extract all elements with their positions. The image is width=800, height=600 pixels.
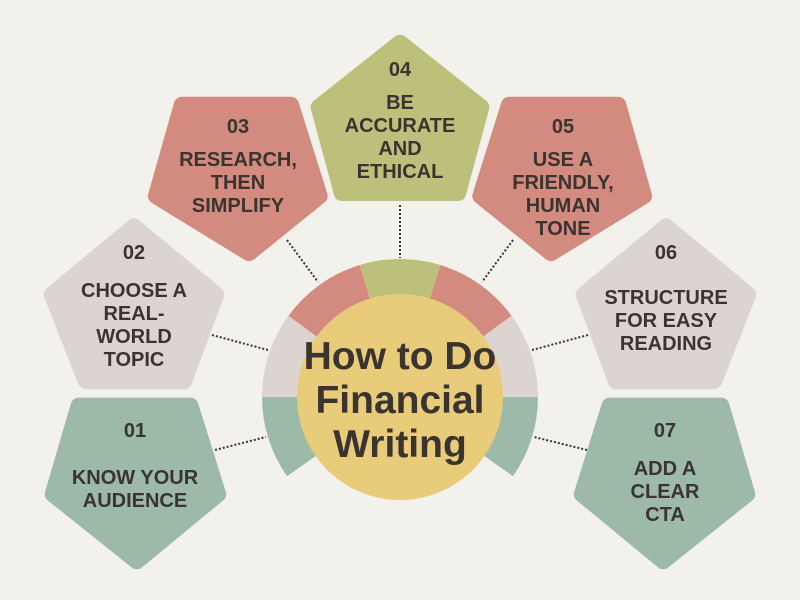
center circle title: Financial <box>315 379 485 422</box>
panel: 07: CTA <box>645 504 685 526</box>
panel: 07: 07 <box>654 420 676 442</box>
panel: 04 <box>319 43 481 193</box>
panel: 02 <box>52 226 216 381</box>
panel: 04: AND <box>378 138 422 160</box>
center circle title <box>297 294 503 500</box>
center circle title: How to Do <box>304 335 496 378</box>
panel: 03 <box>156 105 320 253</box>
panel: 06: FOR EASY <box>615 310 718 332</box>
panel: 04: ETHICAL <box>357 161 443 183</box>
panel: 07 <box>582 406 747 561</box>
panel: 07: CLEAR <box>631 481 700 503</box>
panel: 01 <box>53 406 218 561</box>
panel: 04: 04 <box>389 59 412 81</box>
panel: 03: RESEARCH, <box>179 149 297 171</box>
panel: 02: REAL- <box>103 303 165 325</box>
panel: 05 <box>480 105 644 253</box>
panel: 07: ADD A <box>634 458 696 480</box>
panel: 03: 03 <box>227 116 249 138</box>
panel: 05: TONE <box>535 218 591 240</box>
panel: 06: READING <box>620 333 712 355</box>
panel: 02: WORLD <box>96 326 172 348</box>
panel: 03: THEN <box>211 172 265 194</box>
panel: 02: CHOOSE A <box>81 280 187 302</box>
panel: 01: 01 <box>124 420 146 442</box>
panel: 02: TOPIC <box>104 349 164 371</box>
panel: 06: 06 <box>655 242 677 264</box>
panel: 05: HUMAN <box>526 195 600 217</box>
panel: 05: FRIENDLY, <box>512 172 614 194</box>
center circle title: Writing <box>333 423 467 466</box>
panel: 01: KNOW YOUR <box>72 467 199 489</box>
panel: 05: USE A <box>533 149 593 171</box>
panel: 06: STRUCTURE <box>604 287 728 309</box>
panel: 04: BE <box>386 92 414 114</box>
panel: 04: ACCURATE <box>345 115 455 137</box>
panel: 03: SIMPLIFY <box>192 195 285 217</box>
panel: 01: AUDIENCE <box>83 490 187 512</box>
panel: 06 <box>584 226 748 381</box>
panel: 02: 02 <box>123 242 145 264</box>
panel: 05: 05 <box>552 116 574 138</box>
ring segments <box>262 259 538 476</box>
